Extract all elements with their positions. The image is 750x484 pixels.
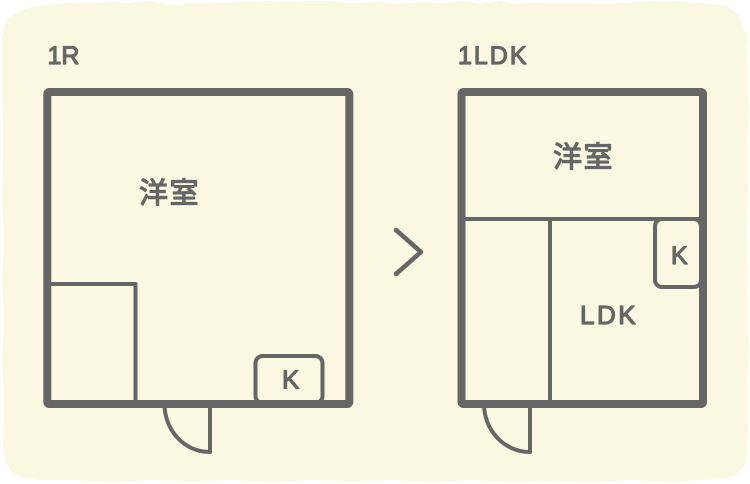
- outer wall: [47, 92, 349, 404]
- kitchen box: [256, 356, 322, 403]
- closet: [48, 284, 136, 404]
- door: [164, 404, 210, 452]
- partition walls: [462, 219, 702, 404]
- room label: LDK: LDK: [580, 300, 638, 330]
- plan: 1R: [47, 42, 349, 452]
- kitchen box: [655, 219, 701, 287]
- door: [484, 404, 530, 452]
- heading: 1LDK: 1LDK: [458, 42, 529, 70]
- kitchen box: K: [671, 242, 688, 270]
- room label: 洋室: 洋室: [139, 177, 200, 210]
- arrow: [396, 230, 421, 274]
- outer wall: [462, 92, 703, 404]
- kitchen box: K: [282, 364, 300, 394]
- heading: 1R: 1R: [48, 42, 79, 70]
- plan: 1LDK: [458, 42, 703, 452]
- room label: 洋室: 洋室: [553, 141, 614, 174]
